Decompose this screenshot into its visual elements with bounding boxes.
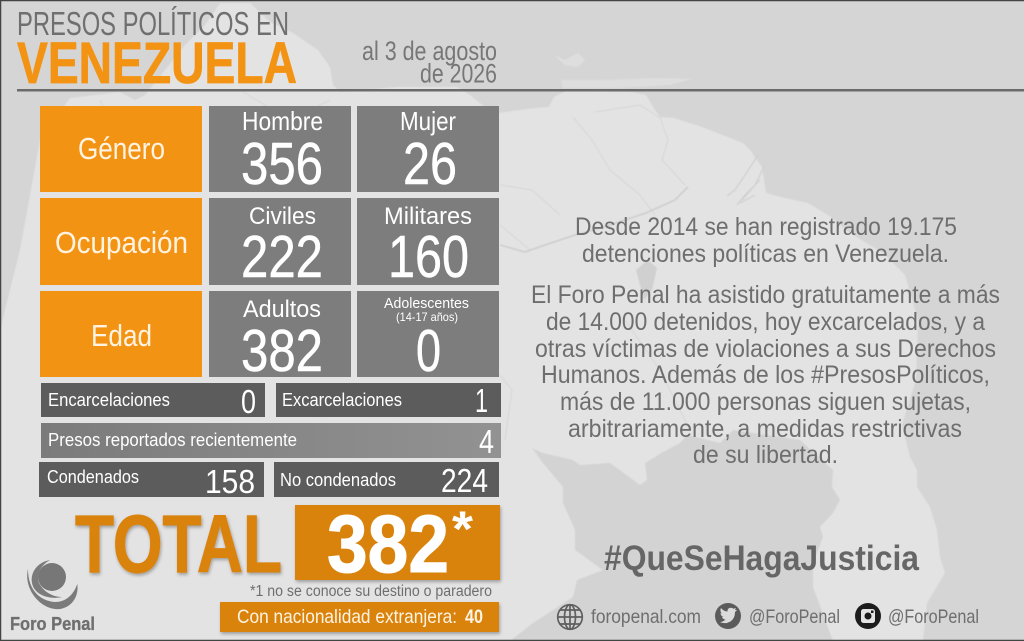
stat: no condenados: 224 [441, 462, 488, 499]
panel: edad: 0 [416, 318, 441, 384]
stat: no condenados [274, 462, 499, 499]
panel: género: 356 [241, 131, 323, 197]
text block: detenciones [575, 213, 957, 268]
stat: encarcelaciones [41, 383, 265, 420]
panel: edad: (14-17 años) [396, 310, 458, 324]
stat: condenados: Condenados [47, 466, 139, 487]
icon: twitter [715, 603, 741, 629]
panel: género: Hombre [242, 106, 323, 136]
title: Venezuela: VENEZUELA [17, 31, 297, 96]
panel: ocupación: Civiles [249, 203, 316, 230]
stat: condenados: 158 [205, 463, 255, 500]
panel: género: Mujer [400, 106, 456, 136]
total value: 382 [327, 499, 449, 590]
stat: encarcelaciones: 0 [241, 383, 256, 420]
panel: edad [40, 291, 499, 384]
stat: presos reportados recientemente: 4 [479, 423, 494, 460]
text block: asistencia del Foro Penal: arbitrariamente, a medidas restrictivas [568, 415, 962, 443]
date [362, 36, 497, 88]
panel: edad: 382 [241, 318, 323, 384]
total label: TOTAL [75, 499, 282, 590]
website: foropenal.com [591, 606, 701, 628]
twitter handle: @ForoPenal [749, 606, 840, 628]
panel: ocupación: 160 [388, 224, 469, 290]
panel: ocupación [40, 198, 499, 290]
logo: Foro Penal [10, 560, 95, 634]
text block: asistencia del Foro Penal: más de 11.000 personas siguen sujetas, [560, 388, 971, 416]
stat: presos reportados recientemente [41, 423, 501, 460]
callout: nacionalidad extranjera [220, 602, 499, 632]
panel: edad: Adolescentes [384, 295, 469, 312]
callout: nacionalidad extranjera: Con nacionalidad extranjera: [237, 606, 457, 628]
total value [295, 499, 500, 590]
panel: ocupación: Ocupación [55, 225, 188, 260]
text block: asistencia del Foro Penal: Humanos. Además de los #PresosPolíticos, [541, 361, 990, 389]
text block: detenciones: Desde 2014 se han registrado 19.175 [575, 213, 957, 241]
panel: género: Género [78, 131, 165, 166]
text block: asistencia del Foro Penal [531, 281, 1000, 469]
panel: género: 26 [403, 131, 457, 197]
panel: edad: Adultos [243, 296, 321, 323]
stat: excarcelaciones: Excarcelaciones [282, 389, 402, 410]
stat: excarcelaciones [276, 382, 501, 419]
date: de 2026 [420, 58, 497, 88]
panel: ocupación: Militares [384, 203, 472, 230]
logo: Foro Penal: Foro Penal [10, 614, 95, 634]
text block: asistencia del Foro Penal: de su libertad. [693, 441, 838, 469]
text block: asistencia del Foro Penal: otras víctimas de violaciones a sus Derechos [535, 335, 996, 363]
panel: género [40, 106, 499, 197]
hashtag: #QueSeHagaJusticia [604, 539, 919, 578]
footnote: *1 no se conoce su destino o paradero [250, 583, 492, 600]
date: al 3 de agosto [362, 36, 497, 66]
stat: presos reportados recientemente: Presos reportados recientemente [48, 429, 297, 450]
title line: presos políticos en: PRESOS POLÍTICOS EN [17, 5, 289, 42]
text block: asistencia del Foro Penal: de 14.000 detenidos, hoy excarcelados, y a [546, 308, 985, 336]
total value: * [452, 501, 474, 557]
stat: condenados [39, 462, 264, 500]
icon: globe [558, 605, 582, 629]
icon: instagram [855, 603, 881, 629]
text block: detenciones: detenciones políticas en Venezuela. [582, 240, 949, 268]
stat: encarcelaciones: Encarcelaciones [48, 389, 170, 410]
instagram handle: @ForoPenal [888, 606, 979, 628]
panel: edad: Edad [91, 318, 152, 353]
stat: no condenados: No condenados [280, 469, 396, 490]
panel: ocupación: 222 [241, 224, 323, 290]
stat: excarcelaciones: 1 [475, 382, 488, 419]
header [17, 5, 497, 96]
callout: nacionalidad extranjera: 40 [465, 606, 483, 628]
